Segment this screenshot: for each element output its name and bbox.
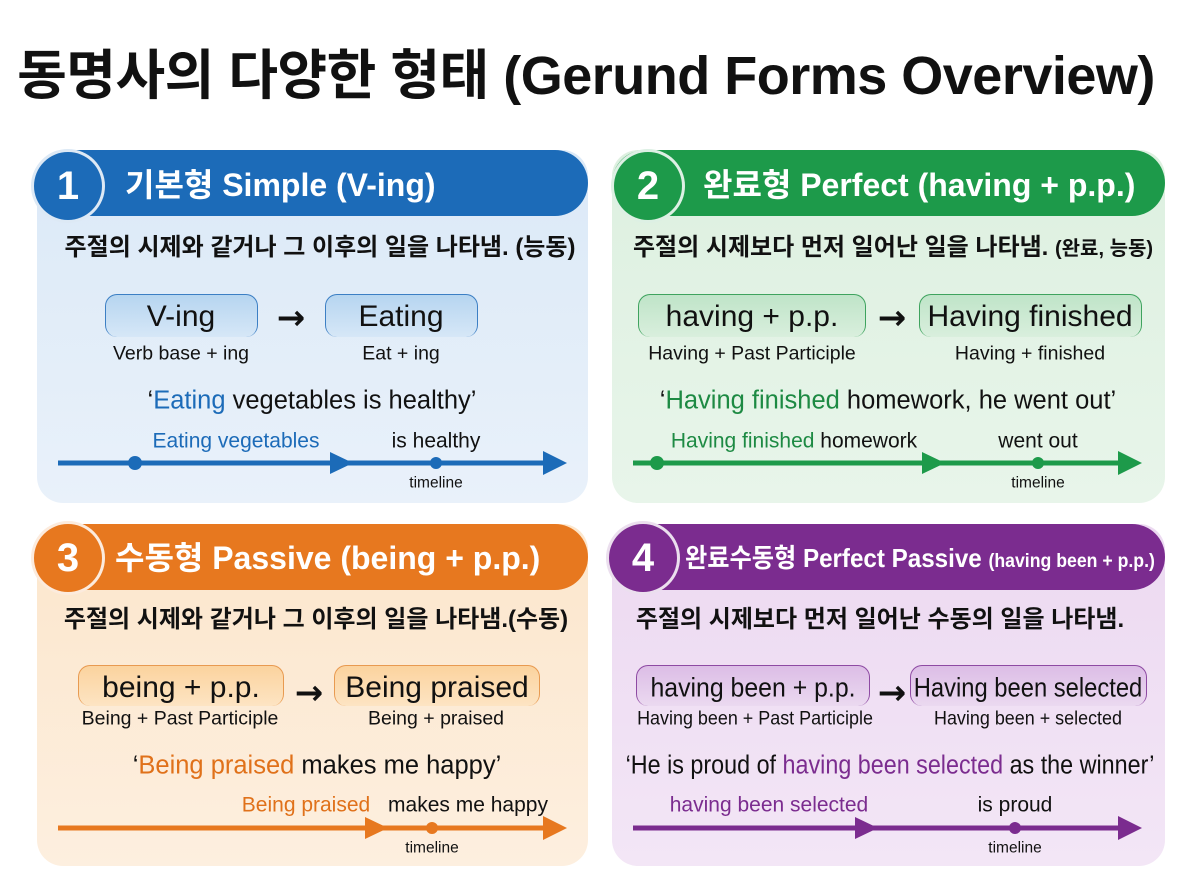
description 4: 주절의 시제보다 먼저 일어난 수동의 일을 나타냄. bbox=[636, 606, 1124, 633]
text: Having been selected bbox=[914, 672, 1142, 702]
text: V-ing bbox=[147, 300, 215, 333]
header: 3 bbox=[37, 524, 588, 590]
text: Being praised bbox=[345, 671, 529, 704]
example box 3 bbox=[334, 665, 540, 706]
text: Having finished homework bbox=[671, 430, 917, 452]
text: is proud bbox=[978, 794, 1052, 816]
example sentence 4: ‘He is proud of having been selected as the winner’ bbox=[626, 751, 1154, 779]
timeline 2 bbox=[633, 451, 1142, 475]
description 1: 주절의 시제와 같거나 그 이후의 일을 나타냄. (능동) bbox=[65, 234, 575, 261]
text: being + p.p. bbox=[102, 671, 260, 704]
arrow 3: → bbox=[295, 673, 323, 713]
text: Having been + selected bbox=[934, 707, 1122, 729]
text: Having finished bbox=[927, 300, 1133, 333]
sublabels 1: Verb base + ing bbox=[113, 342, 249, 364]
example sentence 3: ‘Being praised makes me happy’ bbox=[133, 751, 501, 779]
number circle 3: 3 bbox=[57, 536, 79, 580]
number circle 4: 4 bbox=[632, 536, 654, 580]
number circle 1: 1 bbox=[57, 164, 79, 208]
formula box 1 bbox=[105, 294, 258, 337]
description 3: 주절의 시제와 같거나 그 이후의 일을 나타냄.(수동) bbox=[64, 606, 568, 633]
timeline 4 bbox=[633, 816, 1142, 840]
timeline 3 bbox=[58, 816, 567, 840]
formula box 3 bbox=[78, 665, 284, 706]
panel title 1: 기본형 Simple (V-ing) bbox=[125, 167, 436, 203]
text: having + p.p. bbox=[666, 300, 838, 333]
header: 4 bbox=[612, 524, 1165, 590]
text: Eating vegetables bbox=[153, 430, 319, 452]
title: 동명사의 다양한 형태 (Gerund Forms Overview) bbox=[17, 46, 1155, 106]
formula box 4 bbox=[636, 665, 870, 706]
sublabels 2: Having + Past Participle bbox=[648, 342, 856, 364]
text: is healthy bbox=[392, 430, 480, 452]
text: went out bbox=[998, 430, 1078, 452]
text: having been selected bbox=[670, 794, 868, 816]
number circle 2: 2 bbox=[637, 164, 659, 208]
text: timeline bbox=[988, 839, 1042, 856]
text: Being praised bbox=[242, 794, 370, 816]
text: Being + praised bbox=[368, 707, 504, 729]
panel title 2: 완료형 Perfect (having + p.p.) bbox=[703, 167, 1135, 203]
text: Eat + ing bbox=[362, 342, 440, 364]
panel: 2 perfect bbox=[612, 150, 1165, 503]
arrow 4: → bbox=[878, 673, 906, 713]
text: timeline bbox=[405, 839, 459, 856]
text: timeline bbox=[1011, 474, 1065, 491]
example box 4 bbox=[910, 665, 1147, 706]
panel title 4: 완료수동형 Perfect Passive (having been + p.p.) bbox=[685, 543, 1155, 573]
text: having been + p.p. bbox=[650, 672, 856, 702]
text: makes me happy bbox=[388, 794, 548, 816]
panel: 4 perfect passive bbox=[612, 524, 1165, 866]
text: timeline bbox=[409, 474, 463, 491]
number circle 2 bbox=[611, 149, 685, 223]
sublabels 4: Having been + Past Participle bbox=[637, 707, 873, 729]
number circle 4 bbox=[606, 521, 680, 595]
text: Having + finished bbox=[955, 342, 1105, 364]
formula box 2 bbox=[638, 294, 866, 337]
example box 1 bbox=[325, 294, 478, 337]
panel: 3 passive bbox=[37, 524, 588, 866]
arrow 1: → bbox=[277, 298, 305, 338]
panel title 3: 수동형 Passive (being + p.p.) bbox=[115, 540, 540, 576]
header: 2 bbox=[612, 150, 1165, 216]
arrow 2: → bbox=[878, 298, 906, 338]
example sentence 2: ‘Having finished homework, he went out’ bbox=[660, 386, 1116, 414]
description 2: 주절의 시제보다 먼저 일어난 일을 나타냄. (완료, 능동) bbox=[633, 234, 1153, 261]
example sentence 1: ‘Eating vegetables is healthy’ bbox=[148, 386, 476, 414]
timeline 1 bbox=[58, 451, 567, 475]
number circle 1 bbox=[31, 149, 105, 223]
example box 2 bbox=[919, 294, 1142, 337]
header: 1 bbox=[37, 150, 588, 216]
number circle 3 bbox=[31, 521, 105, 595]
sublabels 3: Being + Past Participle bbox=[82, 707, 278, 729]
text: Eating bbox=[358, 300, 444, 333]
panel: 1 simple bbox=[37, 150, 588, 503]
